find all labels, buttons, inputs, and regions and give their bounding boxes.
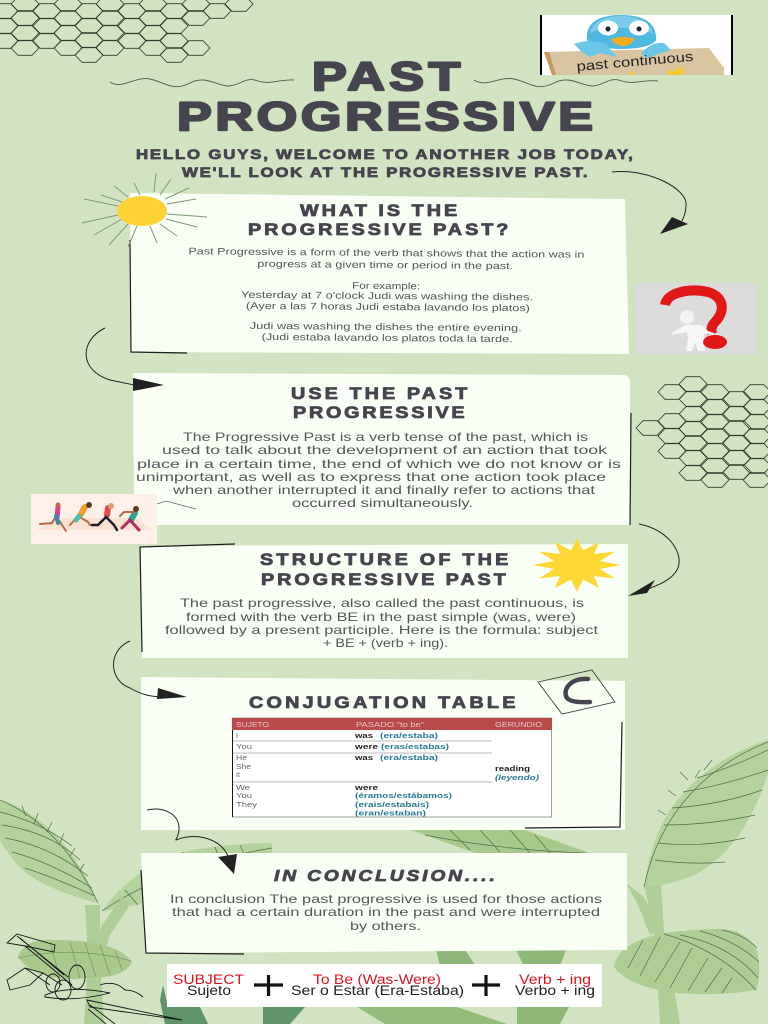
- title: [177, 54, 593, 139]
- formula strip: subject + to be + verb: Verb + ing: [519, 972, 591, 987]
- table: was/were conjugations: reading: [495, 766, 530, 773]
- panel: what is the progressive past: Past Progressive is a form of the verb that shows that the action was in: [188, 246, 584, 261]
- arrow: panel four to panel five: [147, 809, 237, 874]
- table: was/were conjugations: (era/estaba): [380, 733, 438, 740]
- table: was/were conjugations: was: [354, 733, 373, 740]
- panel: in conclusion: by others.: [350, 919, 421, 933]
- insect line drawing: [7, 934, 182, 1024]
- table: was/were conjugations: (erais/estabais): [355, 802, 429, 809]
- panel: use the past progressive: unimportant, as well as to express that one action took place: [136, 470, 606, 484]
- table: was/were conjugations: I: [236, 733, 238, 740]
- icon: yellow starburst: [533, 538, 621, 592]
- table: was/were conjugations: You: [236, 744, 252, 751]
- panel: in conclusion: IN CONCLUSION....: [274, 867, 495, 885]
- formula strip: subject + to be + verb: [167, 964, 602, 1007]
- panel: what is the progressive past: progress at a given time or period in the past.: [257, 259, 513, 272]
- panel: in conclusion: [141, 853, 627, 954]
- formula strip: subject + to be + verb: Verbo + ing: [515, 983, 595, 998]
- formula strip: subject + to be + verb: Sujeto: [187, 983, 231, 998]
- panel: structure of the progressive past: + BE + (verb + ing).: [323, 636, 448, 650]
- panel: in conclusion: In conclusion The past progressive is used for those actions: [170, 892, 602, 906]
- arrow: panel three to panel four: [114, 641, 187, 699]
- panel: conjugation table: [141, 677, 625, 830]
- hexagon pattern: top left: [0, 0, 253, 62]
- table: was/were conjugations: It: [236, 772, 240, 779]
- panel: use the past progressive: USE THE PAST: [291, 385, 467, 403]
- arrow: panel one to panel two: [86, 328, 164, 391]
- panel: what is the progressive past: Yesterday at 7 o'clock Judi was washing the dishes.: [241, 290, 533, 303]
- image: question mark figure: [636, 283, 757, 354]
- table: was/were conjugations: GERUNDIO: [495, 722, 543, 729]
- table: was/were conjugations: They: [236, 802, 258, 809]
- table: was/were conjugations: [232, 718, 552, 818]
- panel: conjugation table: CONJUGATION TABLE: [249, 694, 515, 712]
- decorative caret line near runners: [157, 501, 196, 509]
- icon: sun with rays: [82, 173, 207, 247]
- table: was/were conjugations: (eras/estabas): [381, 744, 449, 751]
- decorative wavy line: right of title: [474, 79, 658, 87]
- table: was/were conjugations: SUJETO: [236, 722, 270, 729]
- panel: use the past progressive: place in a certain time, the end of which we do not know or is: [137, 457, 621, 471]
- panel: use the past progressive: used to talk about the development of an action that took: [162, 443, 608, 457]
- formula strip: subject + to be + verb: SUBJECT: [173, 972, 244, 987]
- panel: structure of the progressive past: formed with the verb BE in the past simple (was, were): [186, 610, 576, 624]
- intro text: [136, 147, 633, 181]
- panel: use the past progressive: [133, 373, 631, 525]
- hexagon pattern: right: [636, 377, 768, 487]
- image: runners: [31, 494, 157, 544]
- table: was/were conjugations: You: [236, 793, 252, 800]
- table: was/were conjugations: (eran/estaban): [355, 810, 426, 818]
- title: PROGRESSIVE: [177, 94, 593, 139]
- panel: structure of the progressive past: PROGRESSIVE PAST: [261, 571, 506, 589]
- panel: what is the progressive past: (Ayer a las 7 horas Judi estaba lavando los platos): [246, 301, 530, 314]
- table: was/were conjugations: He: [236, 755, 247, 762]
- decorative wavy line: left of title: [110, 79, 294, 87]
- image: past continuous bird: past continuous: [576, 49, 694, 74]
- arrow: intro to panel one: [612, 172, 688, 234]
- panel: structure of the progressive past: followed by a present participle. Here is the formula: subject: [165, 623, 599, 637]
- panel: structure of the progressive past: STRUCTURE OF THE: [260, 551, 508, 569]
- icon: letter C badge: [538, 670, 615, 714]
- table: was/were conjugations: We: [236, 785, 250, 792]
- title: PAST: [312, 54, 460, 99]
- panel: in conclusion: that had a certain duration in the past and were interrupted: [172, 905, 600, 919]
- table: was/were conjugations: (era/estaba): [380, 755, 438, 762]
- panel: what is the progressive past: (Judi estaba lavando los platos toda la tarde.: [262, 332, 513, 345]
- intro text: WE'LL LOOK AT THE PROGRESSIVE PAST.: [182, 165, 588, 181]
- panel: use the past progressive: PROGRESSIVE: [293, 404, 465, 422]
- table: was/were conjugations: She: [236, 764, 251, 771]
- panel: what is the progressive past: Judi was washing the dishes the entire evening.: [250, 321, 522, 334]
- panel: what is the progressive past: WHAT IS THE: [300, 202, 457, 220]
- panel: what is the progressive past: For example:: [352, 281, 420, 292]
- table: was/were conjugations: (éramos/estábamos): [355, 793, 452, 800]
- image: past continuous bird: [540, 15, 733, 75]
- table: was/were conjugations: PASADO "to be": [356, 722, 425, 729]
- formula strip: subject + to be + verb: Ser o Estar (Era-Estaba): [291, 983, 464, 998]
- table: was/were conjugations: was: [354, 755, 373, 762]
- formula strip: subject + to be + verb: To Be (Was-Were): [313, 972, 441, 987]
- plant leaves background: [0, 740, 768, 1024]
- panel: use the past progressive: occurred simultaneously.: [292, 496, 473, 510]
- intro text: HELLO GUYS, WELCOME TO ANOTHER JOB TODAY,: [136, 147, 633, 163]
- panel: structure of the progressive past: The past progressive, also called the past continuous, is: [180, 596, 584, 610]
- panel: what is the progressive past: [130, 193, 629, 354]
- panel: use the past progressive: The Progressive Past is a verb tense of the past, which is: [183, 430, 588, 444]
- arrow: panel two to panel three: [628, 524, 679, 596]
- panel: structure of the progressive past: [140, 544, 628, 658]
- panel: what is the progressive past: PROGRESSIVE PAST?: [248, 221, 508, 239]
- panel: use the past progressive: when another interrupted it and finally refer to actions that: [172, 483, 596, 497]
- table: was/were conjugations: were: [354, 744, 378, 751]
- table: was/were conjugations: (leyendo): [495, 775, 540, 782]
- table: was/were conjugations: were: [354, 785, 378, 792]
